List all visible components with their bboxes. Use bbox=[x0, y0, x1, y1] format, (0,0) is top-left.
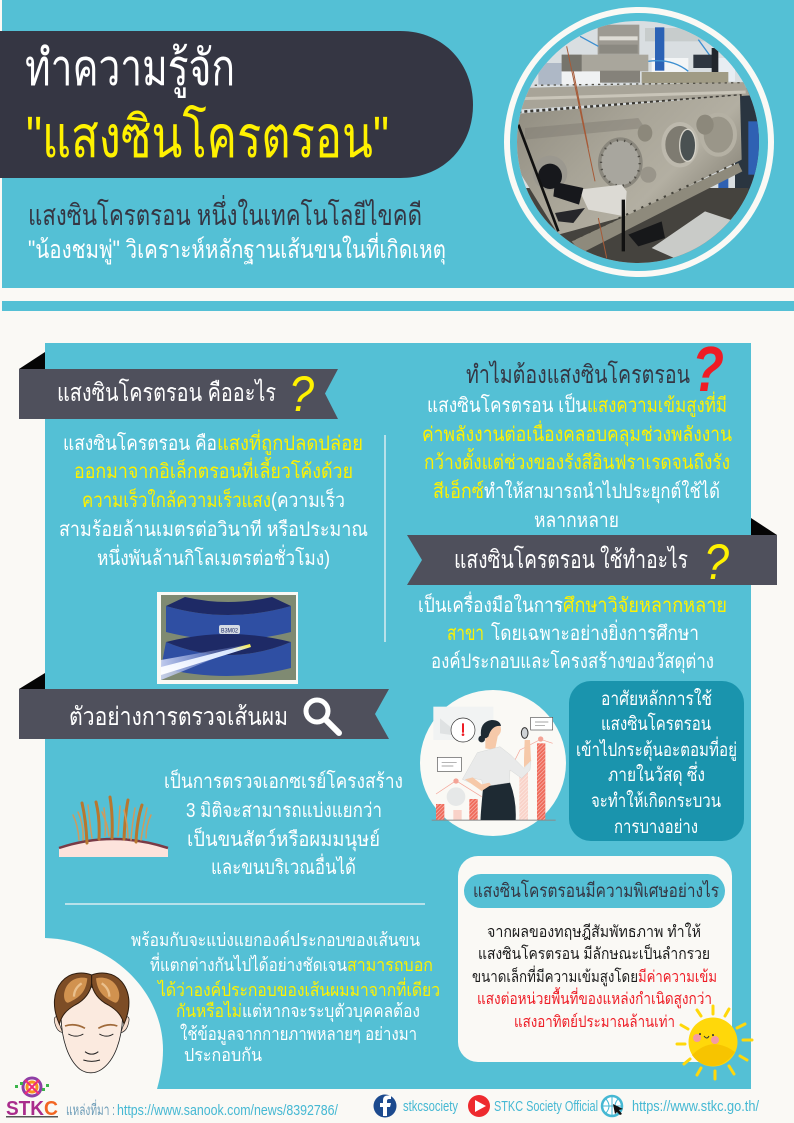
text: why synchrotron: แสงความเข้มสูงที่มี bbox=[587, 391, 727, 418]
text: uses: สาขา bbox=[447, 623, 484, 645]
subtitle: แสงซินโครตรอน หนึ่งในเทคโนโลยีไขคดี bbox=[28, 195, 422, 232]
text: why synchrotron: กว้างตั้งแต่ช่วงของรังสีอินฟราเรดจนถึงรัง bbox=[424, 448, 730, 474]
panel: what is special bbox=[458, 856, 732, 1062]
text: uses bbox=[418, 591, 727, 674]
text: definition: แสงซินโครตรอน คือ bbox=[63, 432, 217, 455]
text: hair composition: กันหรือไม่ bbox=[176, 1000, 242, 1021]
text: hair composition: ประกอบกัน bbox=[184, 1045, 262, 1065]
pill heading bbox=[464, 874, 725, 908]
icon: yellow question mark: ? bbox=[289, 366, 314, 422]
ribbon: hair example: ตัวอย่างการตรวจเส้นผม bbox=[69, 703, 288, 731]
facebook name: stkcsociety bbox=[403, 1098, 458, 1115]
cream corner behind head bbox=[0, 938, 163, 1089]
text: definition: แสงที่ถูกปลดปล่อย bbox=[217, 429, 363, 456]
title pill bbox=[0, 31, 473, 178]
panel: what is special: แสงอาทิตย์ประมาณล้านเท่า bbox=[514, 1012, 675, 1031]
source text: https://www.sanook.com/news/8392786/ bbox=[117, 1102, 339, 1119]
icon: yellow question mark: ? bbox=[704, 534, 729, 590]
callout: dark teal box: อาศัยหลักการใช้ bbox=[601, 688, 712, 710]
logo: STKC: STK bbox=[6, 1098, 45, 1120]
website: https://www.stkc.go.th/ bbox=[632, 1098, 760, 1115]
text: why synchrotron: ค่าพลังงานต่อเนื่องคลอบคลุมช่วงพลังงาน bbox=[422, 420, 732, 447]
header band bbox=[2, 0, 794, 288]
subtitle bbox=[28, 195, 446, 265]
icon: facebook bbox=[374, 1094, 396, 1118]
youtube name: STKC Society Official bbox=[494, 1098, 598, 1115]
text: hair composition: ได้ว่าองค์ประกอบของเส้นผมมาจากที่เดียว bbox=[156, 977, 440, 1000]
divider stripe bbox=[2, 301, 794, 311]
logo: STKC bbox=[6, 1078, 58, 1120]
callout: dark teal box: การบางอย่าง bbox=[614, 817, 698, 838]
text: uses: โดยเฉพาะอย่างยิ่งการศึกษา bbox=[491, 619, 699, 645]
text: why synchrotron: หลากหลาย bbox=[534, 510, 619, 532]
illustration: head with parted hair bbox=[54, 973, 129, 1073]
text: uses: องค์ประกอบและโครงสร้างของวัสดุต่าง bbox=[431, 650, 714, 674]
text: hair composition bbox=[131, 930, 440, 1065]
text: hair composition: แต่หากจะระบุตัวบุคคลต้อง bbox=[242, 1001, 420, 1022]
panel: what is special: ขนาดเล็กที่มีความเข้มสูงโดย bbox=[472, 965, 638, 987]
text: hair xray: และขนบริเวณอื่นได้ bbox=[211, 853, 356, 879]
text: definition: ออกมาจากอิเล็กตรอนที่เลี้ยวโค้งด้วย bbox=[74, 457, 353, 483]
source text: แหล่งที่มา : bbox=[66, 1099, 115, 1119]
logo: STKC: C bbox=[44, 1098, 58, 1120]
text: why synchrotron: ทำให้สามารถนำไปประยุกต์ใช้ได้ bbox=[484, 480, 720, 504]
ribbon: what is synchrotron light: แสงซินโครตรอน คืออะไร bbox=[57, 378, 276, 407]
image: bending magnet with light beam: B3M02 bbox=[221, 628, 238, 634]
text: definition: หนึ่งพันล้านกิโลเมตรต่อชั่วโมง) bbox=[97, 544, 330, 570]
icon: globe with cursor bbox=[602, 1096, 623, 1116]
icon: magnifier bbox=[306, 700, 339, 733]
illustration: hair on skin bbox=[59, 797, 168, 857]
title line 1: ทำความรู้จัก bbox=[25, 40, 235, 98]
text: uses: เป็นเครื่องมือในการ bbox=[418, 591, 563, 617]
ribbon: hair example bbox=[19, 673, 389, 739]
callout: dark teal box: แสงซินโครตรอน bbox=[601, 712, 711, 735]
photo: synchrotron chamber bbox=[504, 7, 774, 277]
text: definition: (ความเร็ว bbox=[271, 487, 345, 512]
panel: what is special: จากผลของทฤษฎีสัมพัทธภาพ ทำให้ bbox=[487, 922, 701, 941]
text: definition: สามร้อยล้านเมตรต่อวินาที หรือประมาณ bbox=[59, 519, 368, 541]
callout: dark teal box: จะทำให้เกิดกระบวน bbox=[591, 790, 721, 812]
text: hair composition: สามารถบอก bbox=[347, 955, 433, 975]
icon: red question mark: ? bbox=[692, 333, 724, 405]
panel: what is special: มีค่าความเข้ม bbox=[638, 968, 717, 986]
source text bbox=[66, 1099, 339, 1119]
text: hair composition: ใช้ข้อมูลจากกายภาพหลายๆ อย่างมา bbox=[180, 1023, 417, 1045]
text: uses: ศึกษาวิจัยหลากหลาย bbox=[563, 595, 727, 617]
icon: youtube bbox=[468, 1095, 490, 1117]
text: hair xray bbox=[164, 768, 403, 879]
text: why synchrotron bbox=[422, 391, 732, 532]
icon: smiling sun bbox=[677, 1006, 752, 1079]
heading: why synchrotron bbox=[466, 333, 724, 405]
panel: what is special: แสงซินโครตรอน มีลักษณะเป็นลำกรวย bbox=[478, 943, 710, 963]
text: why synchrotron: แสงซินโครตรอน เป็น bbox=[427, 392, 587, 417]
panel: what is special: แสงต่อหน่วยพื้นที่ของแหล่งกำเนิดสูงกว่า bbox=[477, 987, 712, 1009]
text: hair xray: เป็นขนสัตว์หรือผมมนุษย์ bbox=[187, 826, 380, 852]
callout: dark teal box bbox=[569, 681, 744, 841]
text: definition bbox=[59, 429, 368, 570]
text: hair xray: 3 มิติจะสามารถแบ่งแยกว่า bbox=[186, 800, 382, 822]
callout: dark teal box: เข้าไปกระตุ้นอะตอมที่อยู่ bbox=[576, 736, 737, 762]
text: definition: ความเร็วใกล้ความเร็วแสง bbox=[82, 487, 271, 512]
pill heading: แสงซินโครตรอนมีความพิเศษอย่างไร bbox=[473, 879, 719, 902]
ribbon: uses bbox=[407, 518, 777, 590]
subtitle: "น้องชมพู่" วิเคราะห์หลักฐานเส้นขนในที่เกิดเหตุ bbox=[28, 232, 446, 265]
title line 2: "แสงซินโครตรอน" bbox=[26, 104, 389, 170]
text: hair composition: ที่แตกต่างกันไปได้อย่างชัดเจน bbox=[150, 952, 347, 975]
text: hair composition: พร้อมกับจะแบ่งแยกองค์ประกอบของเส้นขน bbox=[131, 930, 420, 950]
callout: dark teal box: ภายในวัสดุ ซึ่ง bbox=[608, 761, 705, 787]
text: hair xray: เป็นการตรวจเอกซเรย์โครงสร้าง bbox=[164, 768, 403, 793]
main teal panel bbox=[45, 343, 751, 1089]
ribbon: uses: แสงซินโครตรอน ใช้ทำอะไร bbox=[454, 545, 688, 574]
ribbon: what is synchrotron light bbox=[19, 352, 338, 422]
heading: why synchrotron: ทำไมต้องแสงซินโครตรอน bbox=[466, 360, 690, 389]
text: why synchrotron: สีเอ็กซ์ bbox=[433, 478, 484, 503]
image: bending magnet with light beam bbox=[157, 592, 298, 684]
illustration: woman with magnifier and bar chart bbox=[420, 690, 566, 836]
